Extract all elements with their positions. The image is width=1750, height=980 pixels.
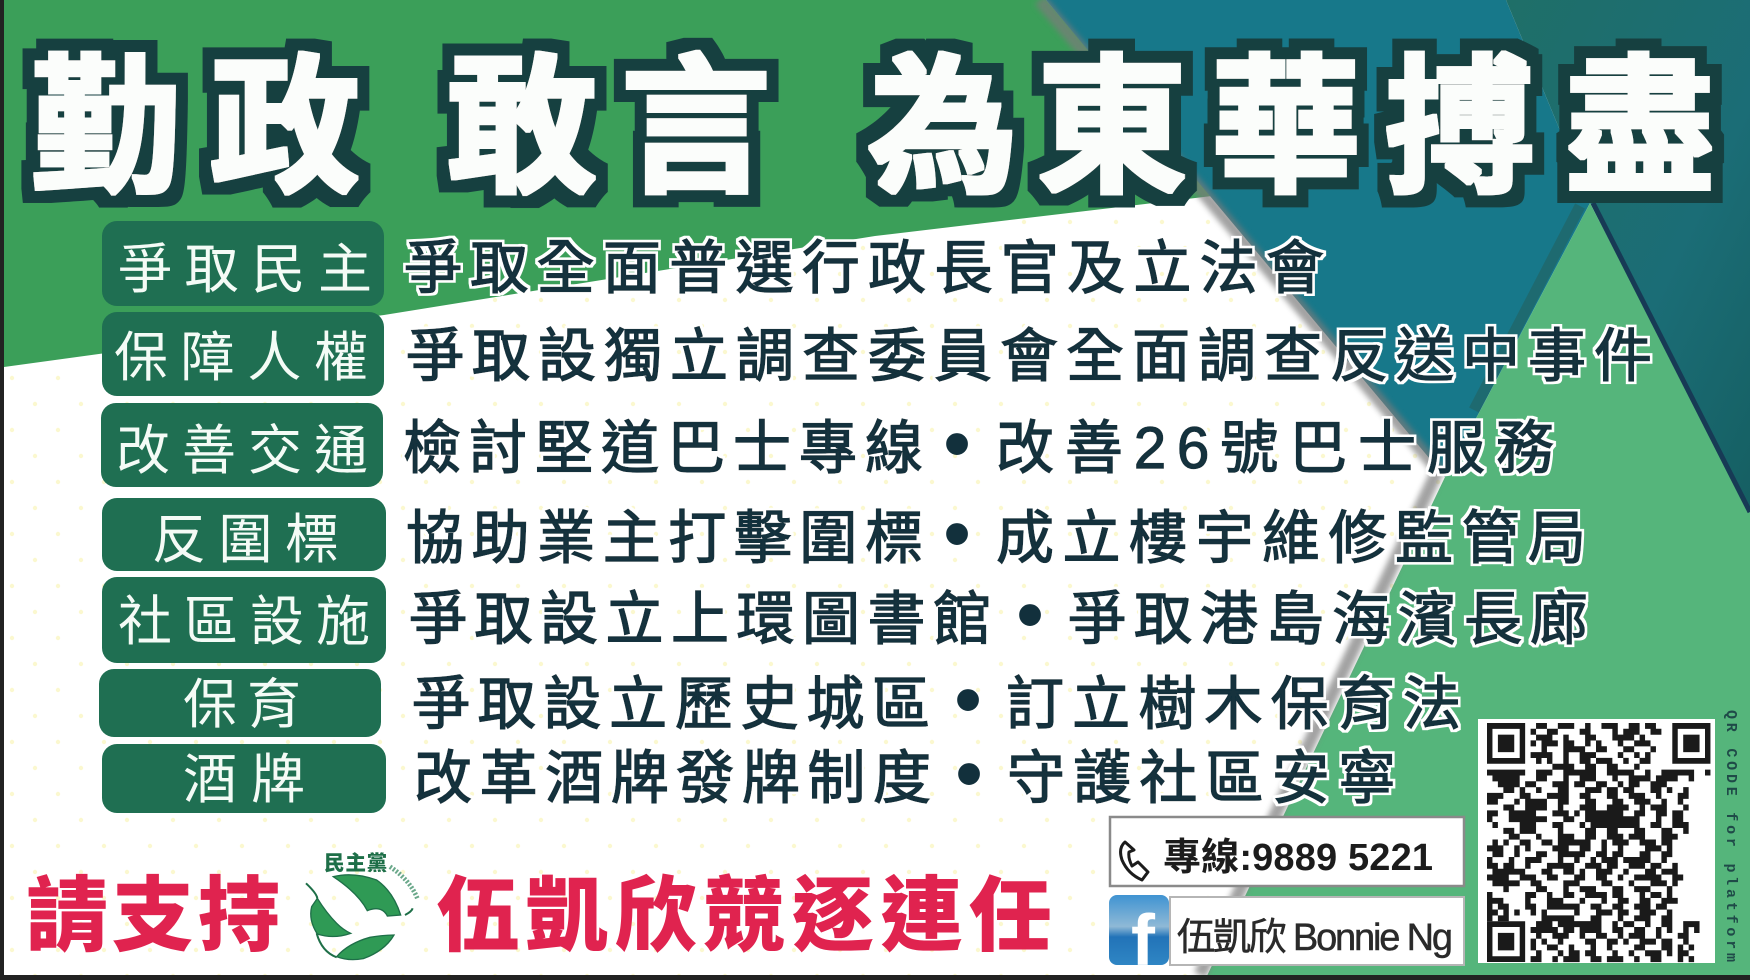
icon: phone: [1121, 842, 1148, 880]
row: democracy: [102, 221, 1324, 306]
row: anti-collusion: [102, 491, 1586, 576]
QR code: [1478, 719, 1715, 963]
facebook box: 伍凱欣 Bonnie Ng: [1177, 917, 1453, 959]
row: anti-collusion: •: [944, 491, 970, 576]
icon: facebook: [1109, 895, 1169, 980]
row: conservation: 保育: [183, 675, 301, 735]
row: transport: 改善26號巴士服務: [996, 416, 1554, 481]
hotline box: [1110, 817, 1464, 886]
row: conservation: [99, 657, 1461, 742]
facebook box: [1109, 895, 1464, 980]
row: anti-collusion: 協助業主打擊圍標: [406, 506, 923, 571]
row: human rights: 保障人權: [114, 328, 368, 388]
icon: party logo dove: [306, 851, 417, 960]
row: liquor licence: •: [956, 731, 982, 816]
row: liquor licence: 改革酒牌發牌制度: [414, 746, 931, 811]
icon: party logo dove: 民主黨: [324, 851, 387, 875]
row: liquor licence: 守護社區安寧: [1007, 746, 1396, 811]
row: conservation: •: [955, 657, 981, 742]
row: community facilities: 爭取港島海濱長廊: [1068, 587, 1588, 652]
row: transport: •: [944, 401, 970, 486]
QR caption: QR CODE for platform: [1722, 710, 1739, 962]
row: human rights: [102, 312, 1652, 396]
row: anti-collusion: 成立樓宇維修監管局: [996, 506, 1586, 571]
slogan: please support: 請支持: [26, 871, 280, 962]
row: human rights: 爭取設獨立調查委員會全面調查反送中事件: [406, 324, 1652, 389]
row: transport: 改善交通: [116, 421, 368, 481]
row: anti-collusion: 反圍標: [152, 510, 339, 570]
row: conservation: 爭取設立歷史城區: [412, 672, 930, 737]
policy list: [99, 221, 1652, 816]
row: liquor licence: 酒牌: [183, 750, 305, 810]
row: transport: [101, 401, 1554, 487]
row: community facilities: •: [1017, 572, 1043, 657]
row: community facilities: [102, 572, 1588, 663]
row: community facilities: 爭取設立上環圖書館: [409, 587, 991, 652]
hotline box: 專線:9889 5221: [1163, 837, 1433, 879]
row: democracy: 爭取全面普選行政長官及立法會: [404, 236, 1324, 301]
title: 勤政 敢言 為東華搏盡: [31, 44, 1715, 212]
row: democracy: 爭取民主: [118, 240, 372, 300]
row: conservation: 訂立樹木保育法: [1006, 672, 1461, 737]
row: liquor licence: [102, 731, 1396, 816]
icon: facebook: f: [1131, 901, 1156, 980]
row: community facilities: 社區設施: [118, 592, 370, 652]
row: transport: 檢討堅道巴士專線: [403, 416, 923, 481]
slogan: candidate name: 伍凱欣競逐連任: [437, 871, 1051, 962]
